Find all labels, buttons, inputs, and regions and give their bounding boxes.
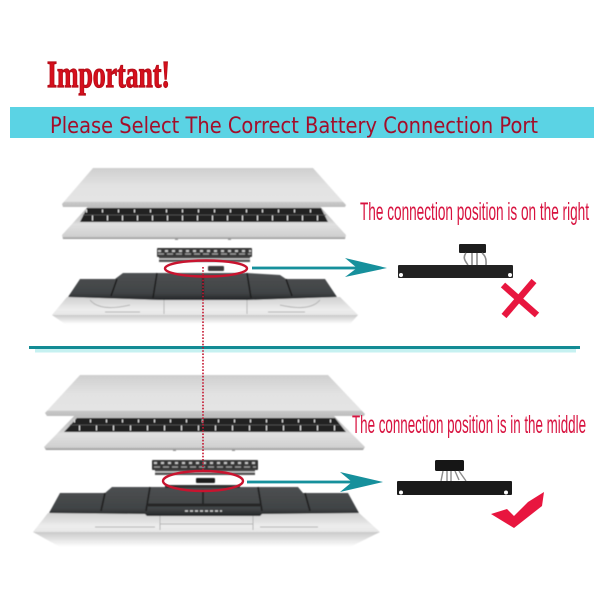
connector in circle: [208, 266, 224, 271]
battery connector: middle position: [397, 460, 512, 495]
highlight ellipse: top connector: [165, 260, 247, 276]
logic board: [157, 248, 252, 262]
banner: select the correct port: Please Select The Correct Battery Connection Port: [50, 114, 538, 139]
connector in circle: [196, 478, 215, 483]
exploded laptop: correct connector: [33, 375, 380, 547]
dotted guide line: [202, 267, 204, 471]
exploded laptop: wrong connector: [52, 168, 358, 324]
battery cells: [49, 487, 359, 516]
arrow: to wrong connector: [252, 258, 387, 277]
arrow: to correct connector: [247, 472, 383, 492]
lower case tray: [33, 513, 380, 532]
highlight ellipse: bottom connector: [163, 471, 243, 491]
icon: red cross: [503, 281, 537, 316]
battery connector: right position: [398, 244, 513, 278]
logic board: [152, 460, 258, 475]
laptop base with keyboard: [62, 202, 346, 240]
laptop lid: [62, 168, 346, 207]
battery cells: [68, 273, 337, 300]
laptop base with keyboard: [44, 410, 365, 451]
divider: [29, 346, 580, 352]
laptop lid: [45, 375, 365, 416]
icon: red check mark: [491, 492, 544, 528]
lower case tray: [52, 297, 358, 315]
title: Important!: Important!: [47, 54, 170, 96]
tray shadow: [33, 532, 380, 547]
tray shadow: [52, 315, 358, 324]
